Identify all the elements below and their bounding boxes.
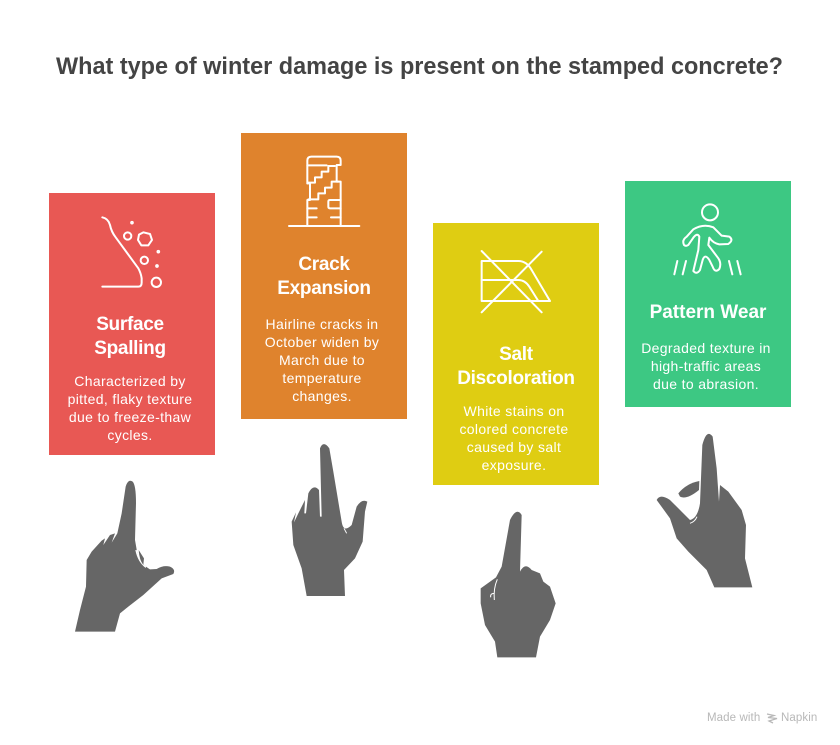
icon: walking person	[673, 203, 742, 276]
heading: crack expansion: Crack	[298, 254, 350, 275]
footer: made with Napkin	[707, 712, 817, 724]
heading: salt discoloration	[457, 344, 575, 389]
panel: salt discoloration	[433, 223, 599, 485]
text: surface spalling: Characterized by	[74, 373, 186, 389]
text: salt discoloration	[459, 403, 569, 473]
heading: pattern wear: Pattern Wear	[650, 302, 766, 323]
text: crack expansion: March due to	[279, 352, 365, 368]
panel: crack expansion	[241, 133, 407, 419]
text: crack expansion	[265, 316, 379, 404]
icon: crossed-out stained surface	[480, 250, 551, 314]
heading: salt discoloration: Discoloration	[457, 368, 575, 389]
icon: spalling surface	[101, 216, 162, 288]
footer: made with Napkin: Made with	[707, 712, 760, 724]
footer: made with Napkin: Napkin	[781, 712, 817, 724]
text: surface spalling: due to freeze-thaw	[69, 409, 191, 425]
panel: surface spalling	[49, 193, 215, 455]
text: salt discoloration: exposure.	[482, 457, 546, 473]
text: pattern wear: high-traffic areas	[651, 358, 761, 374]
panel: pattern wear	[625, 181, 791, 407]
heading: surface spalling: Spalling	[94, 338, 166, 359]
text: crack expansion: changes.	[292, 388, 352, 404]
text: pattern wear: Degraded texture in	[641, 340, 771, 356]
heading: salt discoloration: Salt	[499, 344, 533, 365]
text: salt discoloration: caused by salt	[467, 439, 561, 455]
heading: crack expansion: Expansion	[277, 278, 371, 299]
text: surface spalling	[68, 373, 192, 443]
text: crack expansion: Hairline cracks in	[266, 316, 378, 332]
text: pattern wear: due to abrasion.	[653, 376, 759, 392]
title: What type of winter damage is present on the stamped concrete?	[56, 53, 783, 80]
icon: cracked column	[288, 156, 360, 227]
text: pattern wear	[641, 340, 771, 392]
text: surface spalling: cycles.	[107, 427, 153, 443]
heading: surface spalling: Surface	[96, 314, 164, 335]
text: salt discoloration: White stains on	[464, 403, 564, 419]
heading: surface spalling	[94, 314, 166, 359]
text: surface spalling: pitted, flaky texture	[68, 391, 192, 407]
text: crack expansion: temperature	[282, 370, 362, 386]
text: salt discoloration: colored concrete	[459, 421, 569, 437]
text: crack expansion: October widen by	[265, 334, 379, 350]
heading: crack expansion	[277, 254, 371, 299]
